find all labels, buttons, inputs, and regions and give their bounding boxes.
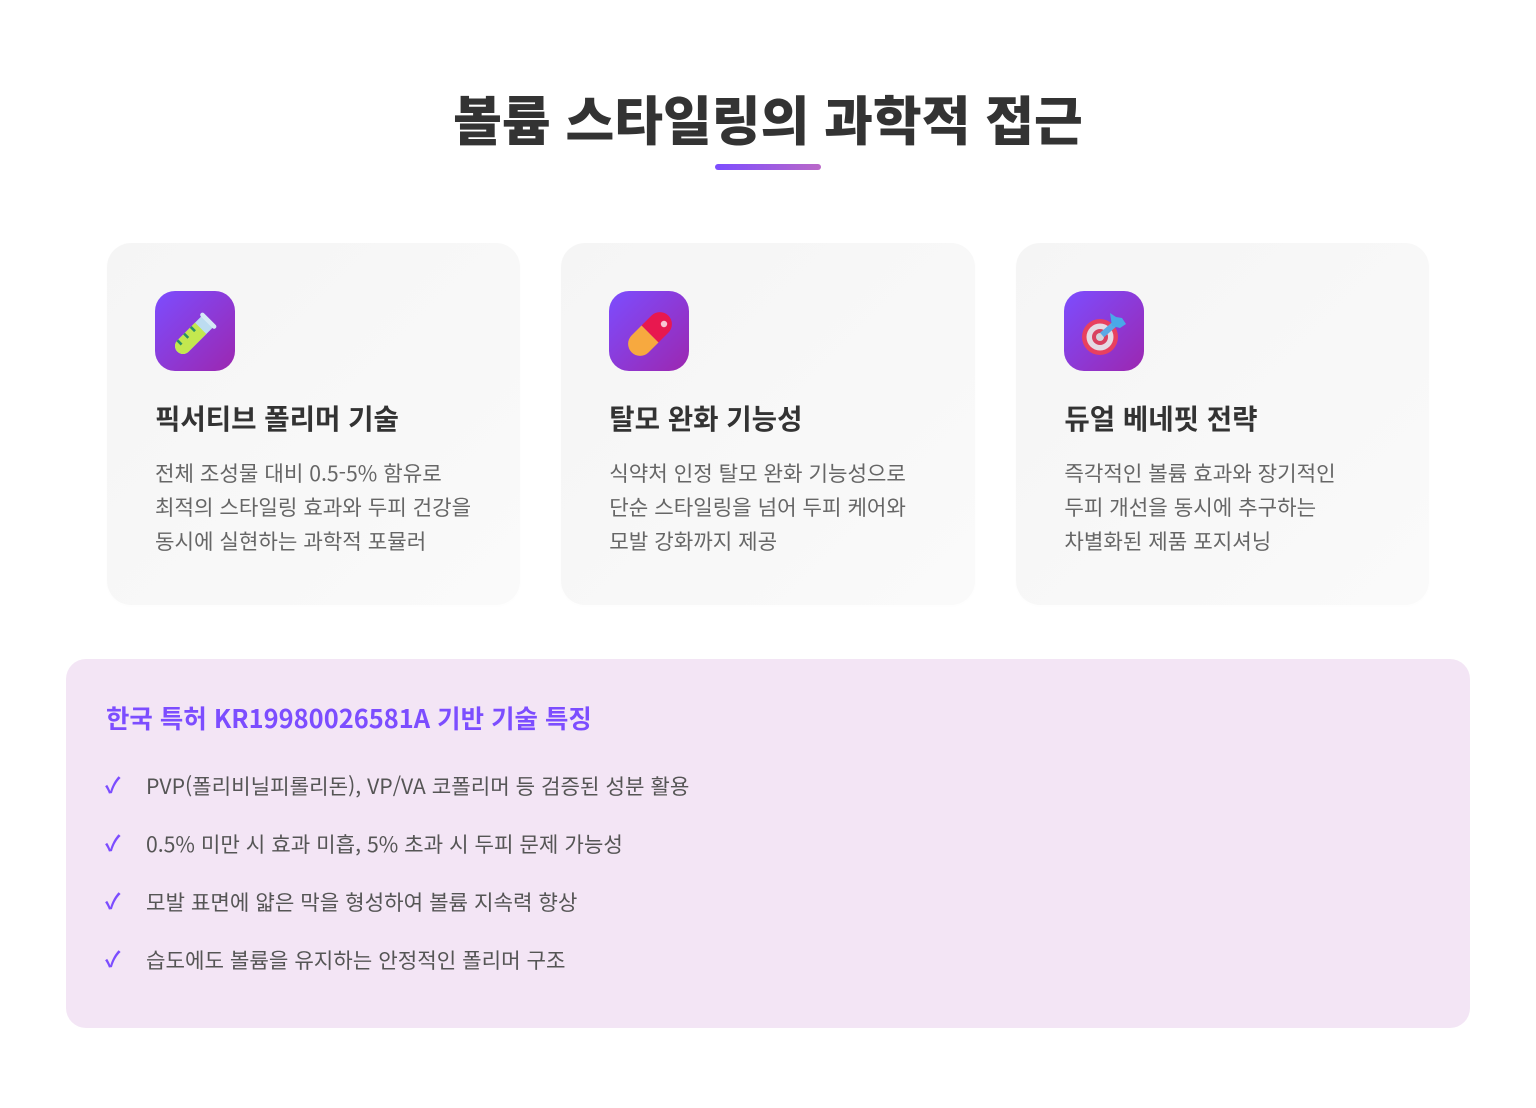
card text: 차별화된 제품 포지셔닝 <box>1064 525 1271 556</box>
card text: 즉각적인 볼륨 효과와 장기적인 <box>1064 457 1336 488</box>
panel: patent features: ✓ <box>105 827 121 858</box>
icon: pill <box>609 291 689 371</box>
list item 4 <box>105 943 566 975</box>
card heading: 픽서티브 폴리머 기술 <box>155 396 399 436</box>
panel: patent features: 0.5% 미만 시 효과 미흡, 5% 초과 시 두피 문제 가능성 <box>146 828 623 859</box>
card text: 식약처 인정 탈모 완화 기능성으로 <box>609 457 906 488</box>
card text: 모발 강화까지 제공 <box>609 525 777 556</box>
card heading: 탈모 완화 기능성 <box>609 396 802 436</box>
title underline <box>715 164 821 170</box>
panel heading: 한국 특허 KR19980026581A 기반 기술 특징 <box>106 699 592 736</box>
card text <box>1064 457 1336 556</box>
panel: patent features: 모발 표면에 얇은 막을 형성하여 볼륨 지속력 향상 <box>146 886 577 917</box>
card text <box>609 457 906 556</box>
icon: test tube <box>155 291 235 371</box>
card text: 동시에 실현하는 과학적 포뮬러 <box>155 525 426 556</box>
panel: hair loss relief card <box>561 243 975 605</box>
panel: patent features: ✓ <box>105 885 121 916</box>
panel: patent features: PVP(폴리비닐피롤리돈), VP/VA 코폴리머 등 검증된 성분 활용 <box>146 770 689 801</box>
title: 볼륨 스타일링의 과학적 접근 <box>453 80 1083 156</box>
list item 1 <box>105 769 689 801</box>
list item 3 <box>105 885 577 917</box>
icon: target with dart <box>1064 291 1144 371</box>
card text: 단순 스타일링을 넘어 두피 케어와 <box>609 491 906 522</box>
panel: dual benefit card <box>1016 243 1429 605</box>
panel: patent features: ✓ <box>105 769 121 800</box>
card text: 두피 개선을 동시에 추구하는 <box>1064 491 1316 522</box>
list item 2 <box>105 827 623 859</box>
card text: 전체 조성물 대비 0.5-5% 함유로 <box>155 457 442 488</box>
card text <box>155 457 471 556</box>
card heading: 듀얼 베네핏 전략 <box>1064 396 1258 436</box>
panel: patent features <box>66 659 1470 1028</box>
panel: fixative polymer card <box>107 243 520 605</box>
panel: patent features: ✓ <box>105 943 121 974</box>
panel: patent features: 습도에도 볼륨을 유지하는 안정적인 폴리머 구조 <box>146 944 566 975</box>
card text: 최적의 스타일링 효과와 두피 건강을 <box>155 491 471 522</box>
